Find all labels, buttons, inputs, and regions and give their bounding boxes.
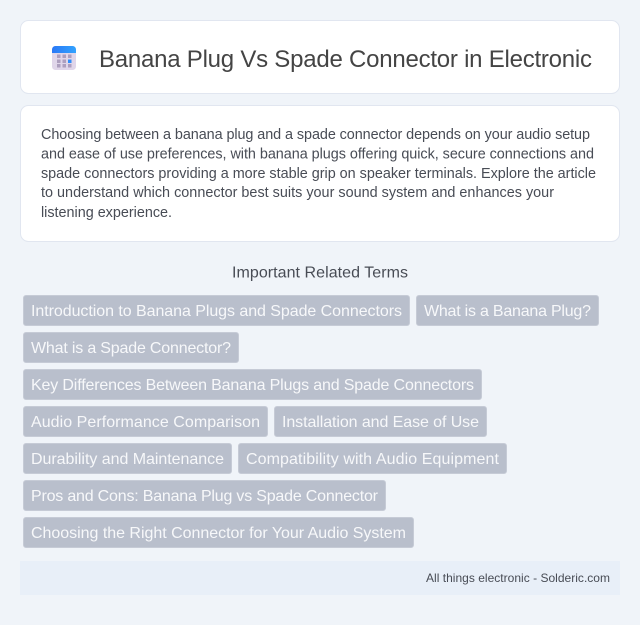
intro text: to understand which connector best suits your sound system and enhances your bbox=[41, 185, 554, 201]
header panel bbox=[20, 20, 620, 94]
tag bbox=[416, 296, 598, 326]
panel: introduction bbox=[20, 106, 620, 242]
tag: Pros and Cons: Banana Plug vs Spade Connector bbox=[31, 488, 379, 505]
title: Banana Plug Vs Spade Connector in Electronic bbox=[99, 46, 592, 73]
heading: important related terms: Important Related Terms bbox=[232, 264, 408, 282]
footer bar bbox=[20, 561, 620, 595]
tag: Durability and Maintenance bbox=[31, 451, 224, 468]
tag bbox=[24, 406, 268, 436]
intro text: and ease of use preferences, with banana plugs offering quick, secure connections and bbox=[41, 146, 594, 162]
tag: What is a Spade Connector? bbox=[31, 340, 231, 357]
tag: Choosing the Right Connector for Your Audio System bbox=[31, 525, 406, 542]
tag: Audio Performance Comparison bbox=[31, 414, 260, 431]
tag bbox=[274, 406, 486, 436]
intro text bbox=[41, 127, 596, 221]
tag list bbox=[24, 296, 598, 548]
tag bbox=[24, 296, 410, 326]
intro text: listening experience. bbox=[41, 205, 172, 221]
tag: Key Differences Between Banana Plugs and Spade Connectors bbox=[31, 377, 474, 394]
intro text: spade connectors providing a more stable grip on speaker terminals. Explore the article bbox=[41, 166, 596, 182]
icon: calendar bbox=[52, 46, 76, 70]
tag: Introduction to Banana Plugs and Spade Connectors bbox=[31, 303, 402, 320]
tag bbox=[24, 518, 414, 548]
tag bbox=[24, 444, 232, 474]
tag bbox=[24, 480, 386, 510]
footer credit: All things electronic - Solderic.com bbox=[426, 571, 610, 585]
intro text: Choosing between a banana plug and a spade connector depends on your audio setup bbox=[41, 127, 590, 143]
tag: Compatibility with Audio Equipment bbox=[246, 451, 500, 468]
tag bbox=[24, 332, 238, 362]
tag: Installation and Ease of Use bbox=[282, 414, 479, 431]
tag bbox=[24, 370, 482, 400]
tag bbox=[238, 444, 506, 474]
tag: What is a Banana Plug? bbox=[424, 303, 591, 320]
